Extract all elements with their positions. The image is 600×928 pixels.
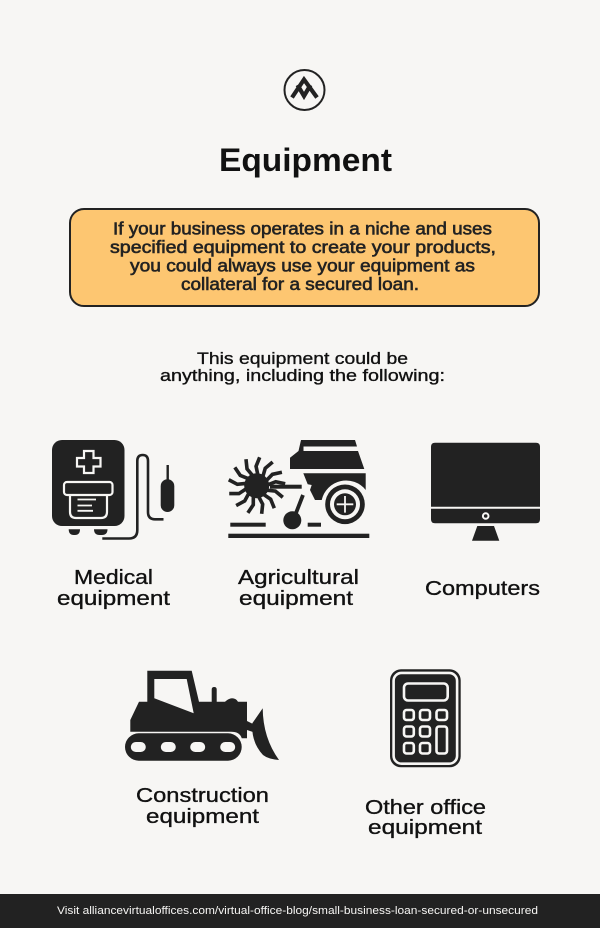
footer bar: [0, 894, 600, 928]
title: Equipment: [219, 142, 392, 178]
label: agricultural equipment: Agricultural: [238, 566, 359, 589]
label: agricultural equipment: [238, 566, 359, 610]
icon: computer monitor: [431, 443, 540, 541]
label: medical equipment: [57, 566, 170, 610]
callout: secured loan note: collateral for a secured loan.: [181, 274, 419, 294]
intro text: This equipment could be: [197, 349, 408, 368]
label: construction equipment: [136, 784, 269, 828]
label: other office equipment: [365, 796, 486, 839]
intro text: anything, including the following:: [160, 366, 445, 385]
label: other office equipment: Other office: [365, 796, 486, 819]
label: other office equipment: equipment: [368, 816, 482, 839]
icon: medical equipment: [52, 440, 174, 538]
callout: secured loan note: specified equipment to create your products,: [110, 237, 496, 257]
icon: bulldozer: [125, 671, 279, 761]
label: medical equipment: Medical: [74, 566, 153, 589]
footer bar: Visit alliancevirtualoffices.com/virtual-office-blog/small-business-loan-secured-or-unsecured: [57, 905, 538, 917]
label: construction equipment: Construction: [136, 784, 269, 807]
icon: calculator: [390, 669, 461, 767]
label: construction equipment: equipment: [146, 805, 259, 828]
callout: secured loan note: If your business operates in a niche and uses: [113, 218, 492, 238]
callout: secured loan note: you could always use your equipment as: [130, 256, 475, 276]
callout: secured loan note: [70, 209, 539, 306]
icon: agricultural equipment: [228, 440, 369, 538]
icon: company logo: [284, 70, 324, 110]
label: agricultural equipment: equipment: [239, 587, 353, 610]
label: medical equipment: equipment: [57, 587, 170, 610]
label: computers: Computers: [425, 577, 540, 600]
intro text: [160, 349, 445, 385]
